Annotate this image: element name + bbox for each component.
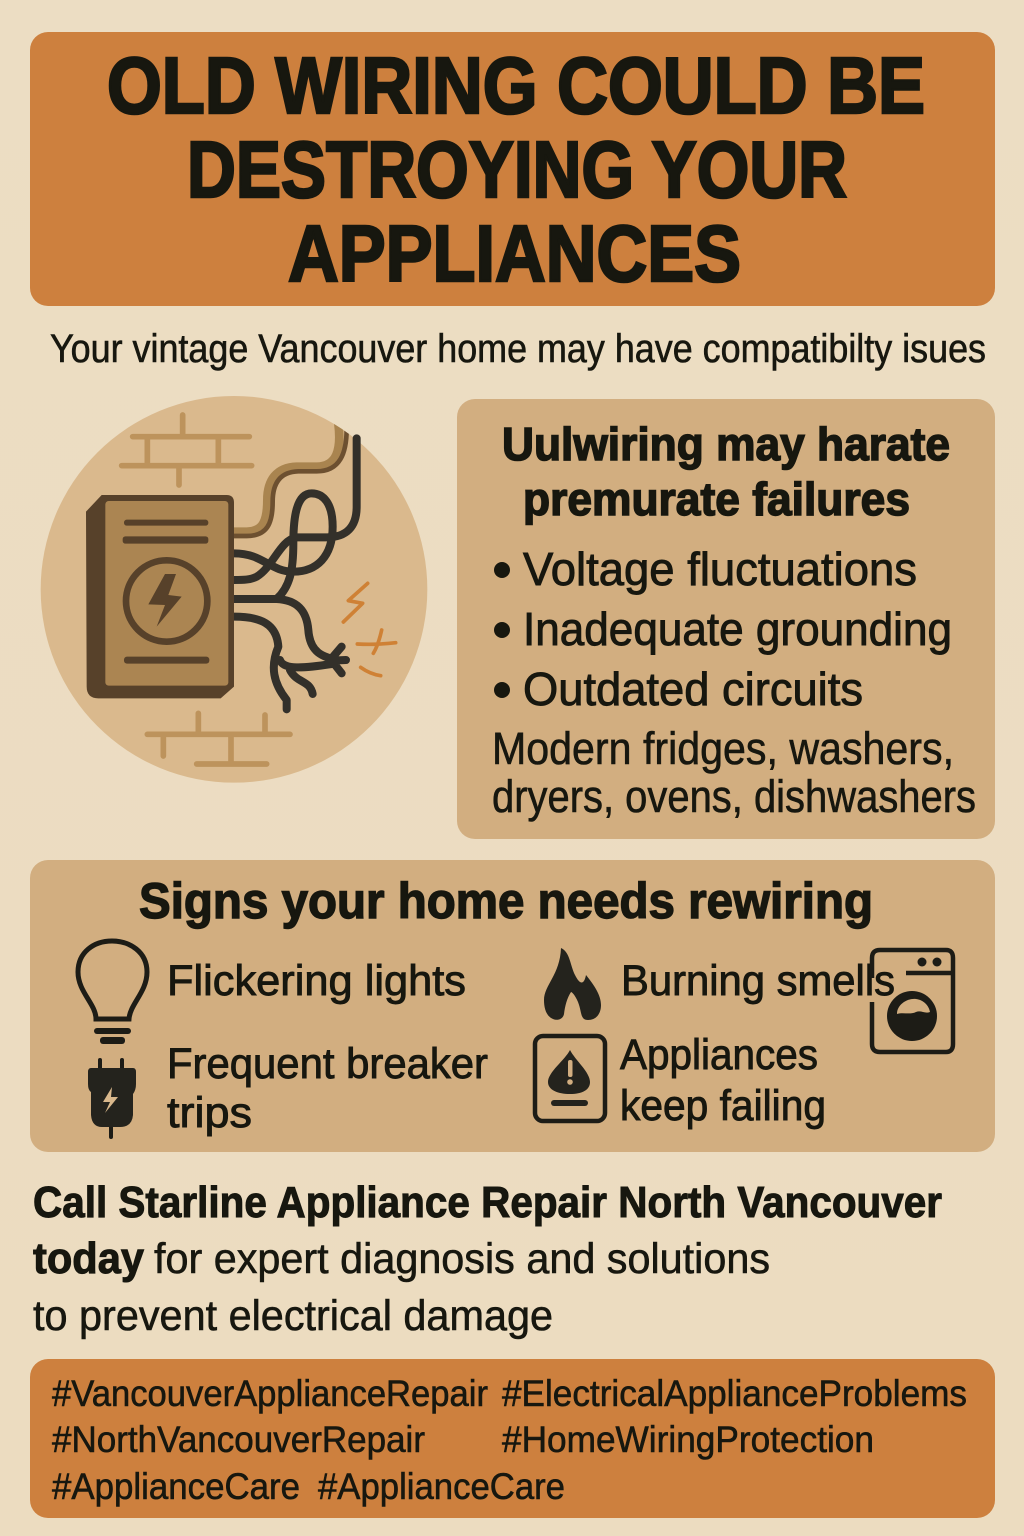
panel heading [502, 418, 950, 525]
appliance note: Modern fridges, washers, [492, 723, 954, 774]
label: flickering lights: Flickering lights [167, 957, 466, 1005]
hashtag banner: #ElectricalApplianceProblems [502, 1373, 967, 1414]
hashtag banner [30, 1359, 995, 1518]
call to action: today [33, 1234, 144, 1283]
label: appliances keep failing: Appliances [620, 1031, 818, 1079]
call to action: for expert diagnosis and solutions [154, 1235, 770, 1283]
panel heading: premurate failures [523, 473, 910, 525]
hashtag banner: #ApplianceCare [52, 1466, 300, 1507]
bullet list: Inadequate grounding [523, 603, 952, 655]
hashtag banner: #HomeWiringProtection [502, 1419, 874, 1460]
icon: warning box [535, 1036, 605, 1121]
hashtag banner: #ApplianceCare [318, 1466, 565, 1507]
label: burning smells: Burning smells [621, 957, 895, 1005]
bullet list: Outdated circuits [523, 663, 863, 715]
bullet list [494, 543, 952, 715]
hashtag banner: #NorthVancouverRepair [52, 1419, 425, 1460]
panel: signs your home needs rewiring [30, 860, 995, 1152]
hashtag banner: #VancouverApplianceRepair [52, 1373, 488, 1414]
icon: plug [88, 1060, 136, 1137]
panel: wiring failures [457, 399, 995, 839]
icon: washing machine [872, 950, 953, 1052]
label: frequent breaker trips: trips [167, 1089, 252, 1137]
bullet list: Voltage fluctuations [523, 543, 917, 595]
panel heading: Uulwiring may harate [502, 418, 950, 470]
label: appliances keep failing [620, 1031, 826, 1130]
label: frequent breaker trips: Frequent breaker [167, 1040, 488, 1088]
icon: flame [544, 948, 601, 1020]
icon: light bulb [78, 941, 147, 1044]
call to action: to prevent electrical damage [33, 1292, 553, 1340]
call to action [33, 1178, 942, 1340]
title banner: DESTROYING YOUR [187, 125, 847, 214]
appliance note: dryers, ovens, dishwashers [492, 771, 976, 822]
label: appliances keep failing: keep failing [620, 1082, 826, 1130]
label: frequent breaker trips [167, 1040, 488, 1137]
call to action: Call Starline Appliance Repair North Vancouver [33, 1178, 942, 1227]
illustration: electrical panel with frayed wires [41, 396, 427, 783]
title banner: OLD WIRING COULD BE [107, 41, 925, 130]
appliance note [492, 723, 976, 822]
title banner: APPLIANCES [288, 209, 741, 298]
title banner [30, 32, 995, 306]
signs heading: Signs your home needs rewiring [139, 873, 873, 929]
